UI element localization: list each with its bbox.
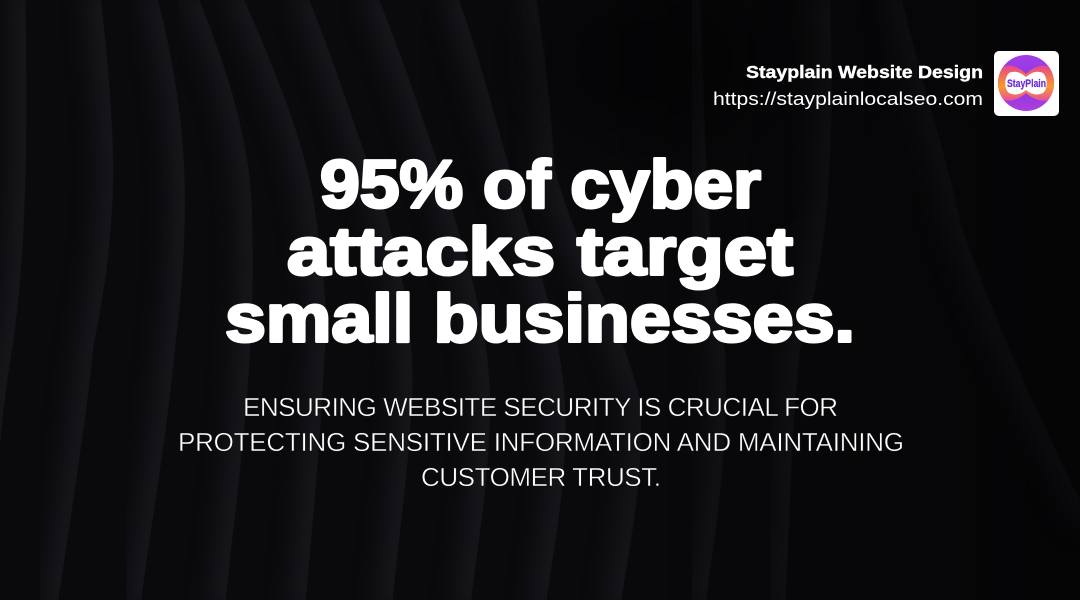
- title: 95% of cyber: [320, 146, 761, 222]
- title: [225, 146, 855, 356]
- subtitle text block: CUSTOMER TRUST.: [421, 462, 661, 492]
- brand name and URL: https://stayplainlocalseo.com: [713, 89, 983, 109]
- brand name and URL: Stayplain Website Design: [746, 62, 983, 82]
- subtitle text block: ENSURING WEBSITE SECURITY IS CRUCIAL FOR: [243, 392, 838, 422]
- icon: StayPlain logo: [994, 51, 1059, 116]
- brand name and URL: [713, 62, 983, 109]
- subtitle text block: [178, 392, 904, 492]
- title: attacks target: [287, 214, 793, 290]
- subtitle text block: PROTECTING SENSITIVE INFORMATION AND MAINTAINING: [178, 427, 904, 457]
- icon: StayPlain logo: StayPlain: [1007, 78, 1046, 90]
- title: small businesses.: [225, 280, 855, 356]
